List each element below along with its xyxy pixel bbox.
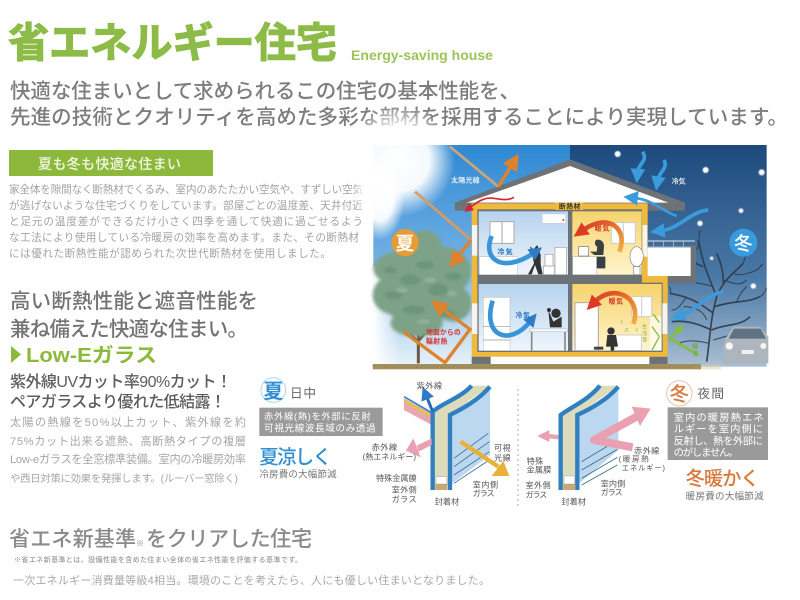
heading: new energy standard: ※ (136, 539, 144, 548)
labels: winter glass: ガラス (601, 487, 623, 497)
arrow: outward heat (537, 430, 558, 442)
callout: winter: ルギーを室内側に (674, 423, 763, 436)
heading: insulation and sound (10, 290, 258, 341)
heading: insulation and sound: 兼ね備えた快適な住まい。 (10, 318, 248, 341)
sun (342, 103, 455, 240)
labels: summer glass: 封着材 (435, 496, 459, 506)
badge: winter: 冬 (670, 384, 689, 406)
labels: winter glass: 金属膜 (527, 465, 551, 475)
callout: summer (259, 408, 383, 436)
tree: summer (373, 230, 472, 363)
snow dots (615, 151, 765, 289)
roof (455, 159, 685, 211)
label: heating saving: 暖房費の大幅節減 (686, 490, 764, 502)
subheading: UV cut: ペアガラスより優れた低結露！ (10, 393, 226, 411)
callout: winter: 反射し、熱を外部に (674, 434, 763, 447)
car (723, 327, 768, 363)
labels: winter glass (525, 445, 665, 506)
arrow: sunlight incoming at roof (450, 147, 498, 187)
label: noise: 騒 (692, 342, 698, 350)
badge: summer: 夏 (263, 381, 283, 403)
text block: insulation description (9, 183, 363, 260)
labels: summer glass: ガラス (392, 494, 417, 504)
callout: summer: 赤外線(熱)を外部に反射 (264, 411, 371, 422)
room: lower right warm (572, 284, 662, 351)
ground (373, 364, 721, 369)
text block: insulation description: 家全体を隙間なく断熱材でくるみ、室内のあたたかい空気や、すずしい空気 (9, 183, 363, 196)
callout: winter: のがしません。 (674, 446, 739, 459)
room: lower left cool: 冷気 (515, 310, 530, 319)
room: upper right warm (572, 211, 643, 275)
heading: new energy standard: 省エネ新基準 (9, 528, 136, 551)
label: daytime: 日中 (290, 386, 316, 400)
label: ground radiant heat (426, 328, 461, 345)
badge: winter: 冬 (734, 233, 753, 254)
panel: comfort heading bar: 夏も冬も快適な住まい (38, 156, 181, 172)
room: lower right warm: 音 (642, 336, 648, 344)
text block: insulation description: と足元の温度差ができるだけ小さく四季を通して快適に過ごせるよう (9, 215, 363, 228)
text block: insulation description: な工法により使用している冷暖房の効率を高めます。また、その断熱材 (9, 231, 359, 244)
callout: winter (668, 407, 768, 460)
summer sky (373, 145, 570, 367)
labels: summer glass: ガラス (473, 488, 495, 498)
intro text (10, 80, 788, 129)
label: insulation (555, 201, 583, 210)
wall windows (472, 225, 667, 334)
panel: winter night glass (525, 381, 768, 506)
label: warm in winter: 冬暖かく (686, 468, 760, 490)
labels: summer glass: 可視 (494, 443, 511, 453)
title: Energy-saving house (351, 48, 494, 63)
arrow: infrared (406, 438, 432, 457)
labels: summer glass: 光線 (494, 453, 511, 463)
floor and wall structure (477, 209, 663, 352)
label: ground radiant heat: 輻射熱 (426, 336, 448, 345)
diagram: winter glass layers (561, 386, 618, 490)
labels: summer glass: (熱エネルギー) (363, 451, 416, 461)
winter sky (570, 145, 767, 367)
title (8, 20, 494, 66)
room: upper left cool (479, 211, 568, 275)
labels: winter glass: 室内側 (601, 479, 625, 489)
label: sunlight: 太陽光線 (451, 175, 480, 184)
arrow: reflected heat (594, 407, 651, 447)
arrow: sunlight incoming at wall (415, 192, 471, 240)
label: ground radiant heat: 地面からの (426, 328, 461, 337)
insulation frame (472, 203, 668, 359)
room: upper left cool: 冷気 (497, 247, 513, 256)
labels: winter glass: 特殊 (527, 456, 543, 466)
badge: winter (729, 229, 757, 257)
text block: insulation description: が逃げないような住宅づくりをしています。部屋ごとの温度差、天井付近 (9, 199, 363, 212)
intro text: 快適な住まいとして求められるこの住宅の基本性能を、 (10, 80, 520, 103)
subheading: UV cut (10, 373, 232, 411)
label: cold air: 冷気 (672, 177, 686, 186)
label: noise: 音 (692, 349, 698, 357)
text block: energy grade: 一次エネルギー消費量等級4相当。環境のことを考えたら、人にも優しい住まいとなりました。 (13, 573, 490, 587)
divider (517, 389, 519, 506)
balcony (642, 241, 696, 283)
badge: winter (667, 381, 692, 406)
heading: Low-E glass: Low-Eガラス (26, 344, 157, 367)
room: lower right warm: ♫ (624, 326, 629, 333)
label: cooling saving: 冷房費の大幅節減 (259, 469, 337, 481)
arrows: noise (670, 330, 698, 355)
arrows: cold air (635, 152, 723, 315)
labels: winter glass: (暖房熱 (619, 454, 649, 464)
heading: insulation and sound: 高い断熱性能と遮音性能を (10, 290, 258, 313)
intro text: 先進の技術とクオリティを高めた多彩な部材を採用することにより実現しています。 (10, 106, 788, 129)
arrow: radiant heat from ground (403, 308, 470, 363)
labels: summer glass: 特殊金属膜 (376, 473, 417, 483)
room: upper right warm: 暖気 (595, 224, 609, 233)
label: night: 夜間 (697, 387, 724, 401)
heading: new energy standard (9, 528, 312, 551)
labels: winter glass: 室外側 (525, 480, 551, 490)
arrow: ultraviolet (427, 397, 433, 412)
house illustration (342, 103, 768, 369)
panel: summer daytime glass (259, 378, 511, 506)
foundation (472, 357, 668, 365)
room: lower right warm: 活 (642, 329, 648, 337)
text block: Low-E description: 太陽の熱線を50%以上カット、紫外線を約 (10, 415, 246, 429)
badge: summer: 夏 (396, 233, 415, 254)
labels: summer glass: 室外側 (392, 485, 417, 495)
labels: summer glass (363, 381, 511, 506)
label: cool in summer: 夏涼しく (259, 446, 332, 468)
room: lower right warm: 生 (642, 322, 648, 330)
text block: Low-E description: Low-eガラスを全窓標準装備。室内の冷暖房効率 (10, 452, 246, 466)
labels: winter glass: 赤外線 (634, 445, 659, 455)
arrow: sunlight reflected at roof (498, 165, 512, 187)
subheading: UV cut: 紫外線UVカット率90%カット！ (10, 373, 232, 391)
panel: comfort heading bar (9, 150, 213, 176)
labels: winter glass: 封着材 (561, 496, 586, 506)
labels: winter glass: ガラス (525, 489, 547, 499)
heading: new energy standard: をクリアした住宅 (146, 528, 312, 551)
labels: summer glass: 赤外線 (372, 442, 397, 452)
arrow: heat in attic (470, 197, 514, 208)
diagram: summer glass layers (404, 386, 490, 490)
label: noise (692, 342, 698, 357)
room: lower left cool (479, 284, 568, 351)
room: lower right warm: ♪ (635, 326, 638, 333)
room: lower right warm: 暖気 (609, 296, 623, 305)
text block: Low-E description: や西日対策に効果を発揮します。(ルーバー窓除く) (10, 472, 238, 485)
tree: bare winter tree (669, 230, 767, 362)
callout: winter: 室内の暖房熱エネ (674, 411, 764, 424)
arrow: visible light (461, 442, 498, 467)
room: lower right warm: ♪ (620, 318, 623, 325)
labels: summer glass: 室内側 (473, 479, 498, 489)
badge: summer (391, 229, 419, 256)
text block: Low-E description (10, 415, 246, 485)
note: standard definition: ※省エネ新基準とは、設備性能を含めた住まい全体の省エネ性能を評価する基準です。 (14, 555, 302, 564)
arrowhead: visible light (492, 461, 509, 476)
text block: insulation description: には優れた断熱性能が認められた次世代断熱材を使用しました。 (9, 247, 331, 260)
arrow: sunlight reflected at wall (457, 240, 471, 257)
text block: Low-E description: 75%カット出来る遮熱、高断熱タイプの複層 (10, 435, 246, 448)
label: insulation: 断熱材 (559, 201, 581, 210)
callout: summer: 可視光線波長域のみ透過 (264, 423, 376, 435)
labels: winter glass: エネルギー) (622, 464, 665, 473)
title: 省エネルギー住宅 (8, 20, 337, 66)
labels: summer glass: 紫外線 (417, 381, 442, 391)
